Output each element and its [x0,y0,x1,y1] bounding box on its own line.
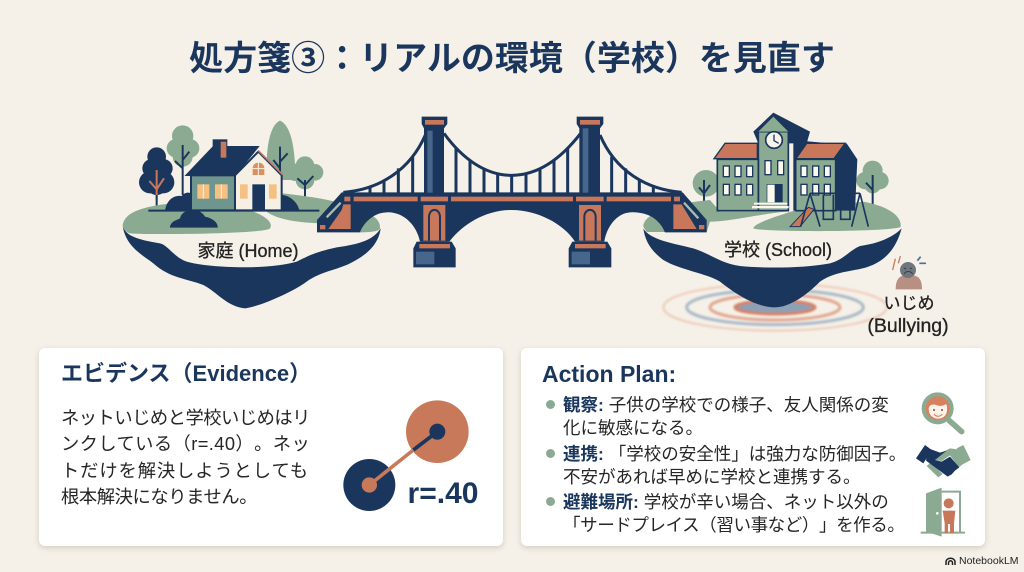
label: home: 家庭 (Home) [197,241,299,261]
label: school: 学校 (School) [724,240,832,260]
label: bullying: いじめ [884,294,934,313]
evidence body text: 根本解決になりません。 [61,486,257,507]
icon: open door with person [921,488,965,537]
evidence body text [61,407,310,507]
panel: action plan [521,348,985,546]
text: cooperate: 連携: 「学校の安全性」は強力な防御因子。 [563,444,906,464]
action plan heading: Action Plan: [542,361,676,387]
text: observe [563,395,889,438]
text: cooperate [563,444,906,487]
evidence body text: ンクしている（r=.40）。ネッ [61,433,310,454]
icon: bullied child [893,256,926,289]
bullet: cooperate [546,449,555,458]
evidence body text: ネットいじめと学校いじめはリ [61,407,310,428]
correlation value: r=.40 [408,477,478,510]
illustration: home and school islands joined by a bridge [122,112,949,337]
text: refuge: 避難場所: 学校が辛い場合、ネット以外の [563,492,889,512]
panel: evidence [39,348,503,546]
bridge [317,117,707,267]
text: refuge [563,492,904,535]
watermark: NotebookLM: NotebookLM [959,555,1019,567]
chart: correlation circles r=.40 [343,400,478,511]
icons: magnifier, handshake, door [916,392,971,536]
evidence body text: トだけを解決しようとしても [61,460,309,481]
icon: NotebookLM logo [945,558,956,565]
icon: magnifying glass with child [924,394,962,432]
label: bullying [867,294,949,337]
text: cooperate: 不安があれば早めに学校と連携する。 [563,467,860,487]
island: school [643,113,902,307]
bullet: observe [546,400,555,409]
title: 処方箋③：リアルの環境（学校）を見直す [189,40,835,78]
bullet: refuge [546,497,555,506]
text: observe: 化に敏感になる。 [563,418,703,438]
icon: handshake [916,445,971,477]
island: home [123,121,381,308]
ripples: bullying impact [663,284,887,331]
text: observe: 観察: 子供の学校での様子、友人関係の変 [563,395,889,415]
label: bullying: (Bullying) [867,315,949,337]
text: refuge: 「サードプレイス（習い事など）」を作る。 [563,515,904,535]
evidence heading: エビデンス（Evidence） [61,361,311,386]
